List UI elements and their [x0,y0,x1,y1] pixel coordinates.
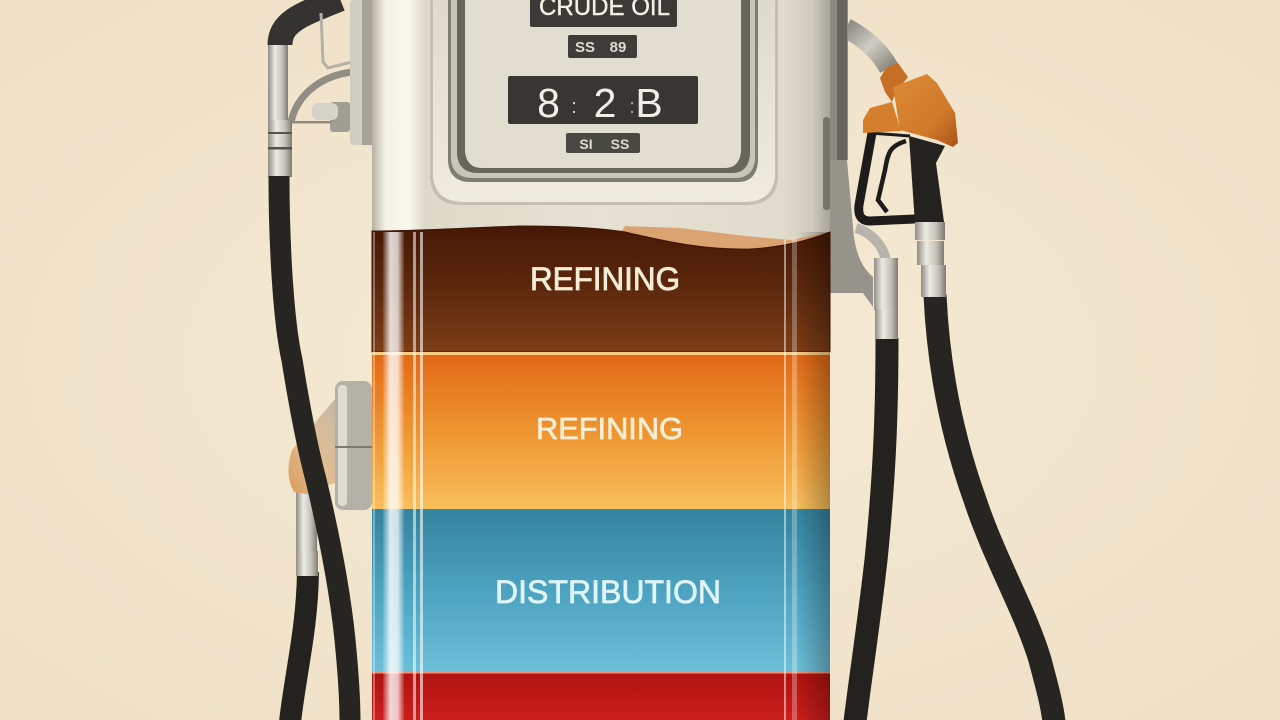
display bezel [430,0,778,205]
digital readout: 2 [594,80,616,126]
valve knob [292,102,350,132]
nozzle metal collars [915,222,946,297]
curved arm [291,72,352,122]
thin bracket [321,13,352,68]
side valve box [335,381,372,510]
layer label: distribution: DISTRIBUTION [495,574,721,610]
left hoses and fittings [268,0,372,720]
nozzle supply pipe [846,28,889,68]
collar [268,120,292,177]
digital readout: : [629,96,635,118]
upper metal pipe [268,45,288,121]
layer: crude foam [600,226,830,260]
elbow pipe [856,228,886,262]
layer: blue distribution [372,511,830,672]
digital readout [508,76,698,126]
digital readout: : [571,96,577,118]
nozzle handle [859,133,915,221]
pump head side panels [350,0,848,160]
elbow collars [874,258,898,339]
layer: red [372,673,830,720]
small label bottom: SS [611,136,629,152]
bracket [830,120,873,307]
lower left hose [290,572,308,720]
main right hose [935,295,1054,720]
layer: orange refining [372,355,830,509]
layer label: refining brown: REFINING [530,261,680,297]
right hoses and nozzle [830,28,1054,720]
small label top: SS [575,39,595,56]
side slot [823,117,830,210]
divider: brown orange [372,352,830,355]
left fitting pipe [296,490,318,576]
divider: orange blue [372,509,830,511]
side valve cone [288,393,342,494]
small label top: 89 [610,39,626,56]
right lower hose [855,338,887,720]
digital readout: B [635,80,663,126]
divider: blue red [372,672,830,674]
layer: brown refining [372,226,830,352]
layer label: refining orange: REFINING [536,411,683,446]
hook pipe [280,0,340,45]
digital readout: 8 [537,80,560,126]
fuel layers [372,226,830,720]
nozzle orange head [863,63,958,147]
glass reflections [373,232,830,720]
main left hose [279,176,350,720]
small label bottom: SI [579,136,593,152]
small label top [568,35,637,58]
small label bottom [566,133,640,153]
nozzle body black [909,136,945,224]
pump body [372,0,830,720]
